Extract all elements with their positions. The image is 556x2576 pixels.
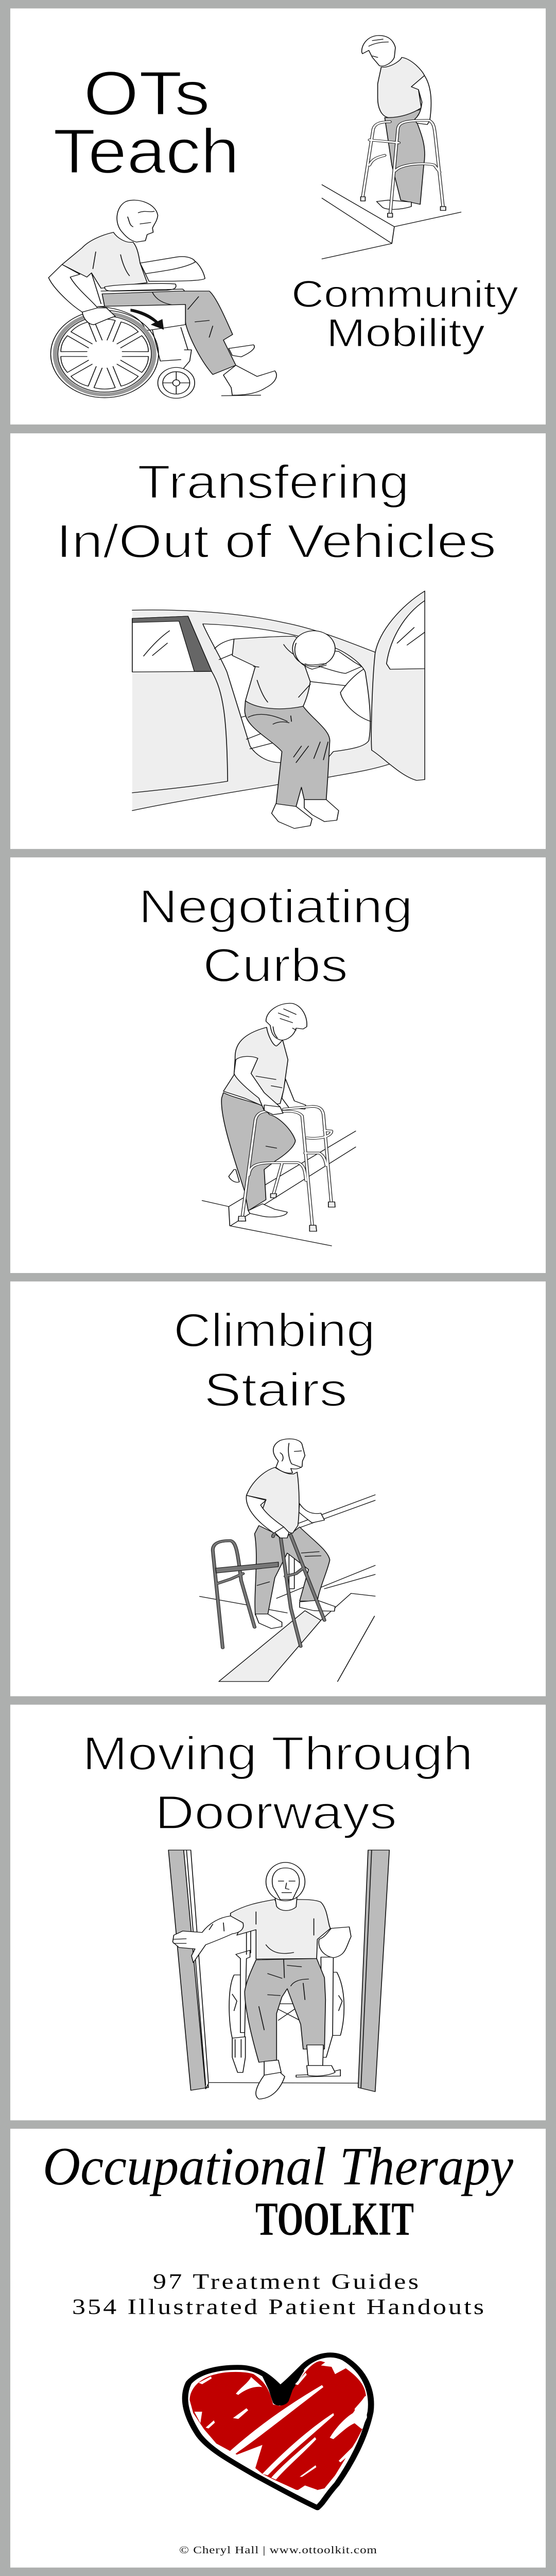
panel: Climbing Stairs — [10, 1281, 546, 1696]
icon: scribbled red heart — [185, 2355, 371, 2508]
illustration: man in wheelchair passing through doorway — [168, 1850, 389, 2099]
title: Community Mobility — [291, 274, 518, 355]
logo: Occupational Therapy TOOLKIT — [43, 2137, 513, 2245]
panel: Occupational Therapy Toolkit — [10, 2129, 546, 2568]
heading: Transfering In/Out of Vehicles: Transfering — [137, 455, 409, 509]
panel: Transfering In/Out of Vehicles — [10, 433, 546, 849]
heading: Negotiating Curbs — [138, 880, 413, 992]
text: product counts — [72, 2270, 484, 2319]
panel: OTs Teach Community Mobility — [10, 8, 546, 425]
logo: Occupational Therapy TOOLKIT: TOOLKIT — [255, 2193, 414, 2245]
illustration: man climbing stairs with walker — [200, 1439, 375, 1682]
illustration: woman with walker on curb — [202, 1003, 356, 1246]
illustration: man with walker at curb — [322, 36, 461, 259]
title: Community Mobility: Community — [291, 274, 518, 315]
heading: Moving Through Doorways: Moving Through — [82, 1727, 473, 1780]
text: product counts: 354 Illustrated Patient Handouts — [72, 2295, 484, 2319]
text: product counts: 97 Treatment Guides — [153, 2270, 419, 2294]
heading: Negotiating Curbs: Negotiating — [138, 880, 413, 933]
heading: Climbing Stairs: Climbing — [173, 1303, 375, 1357]
panel: Negotiating Curbs — [10, 857, 546, 1273]
heading: Climbing Stairs — [173, 1303, 375, 1416]
title: OTs Teach: Teach — [53, 116, 239, 187]
illustration: person getting out of car — [132, 589, 427, 828]
heading: Transfering In/Out of Vehicles: In/Out of Vehicles — [56, 515, 496, 568]
heading: Moving Through Doorways — [82, 1727, 473, 1839]
heading: Negotiating Curbs: Curbs — [203, 939, 348, 992]
credit line: © Cheryl Hall | www.ottoolkit.com — [179, 2544, 377, 2555]
illustration: man in wheelchair — [48, 200, 276, 398]
panel: Moving Through Doorways — [10, 1705, 546, 2120]
heading: Moving Through Doorways: Doorways — [155, 1786, 397, 1839]
title: OTs Teach — [53, 58, 239, 187]
heading: Transfering In/Out of Vehicles — [56, 455, 496, 568]
heading: Climbing Stairs: Stairs — [204, 1363, 348, 1416]
title: Community Mobility: Mobility — [326, 311, 485, 355]
title: OTs Teach: OTs — [83, 58, 210, 128]
